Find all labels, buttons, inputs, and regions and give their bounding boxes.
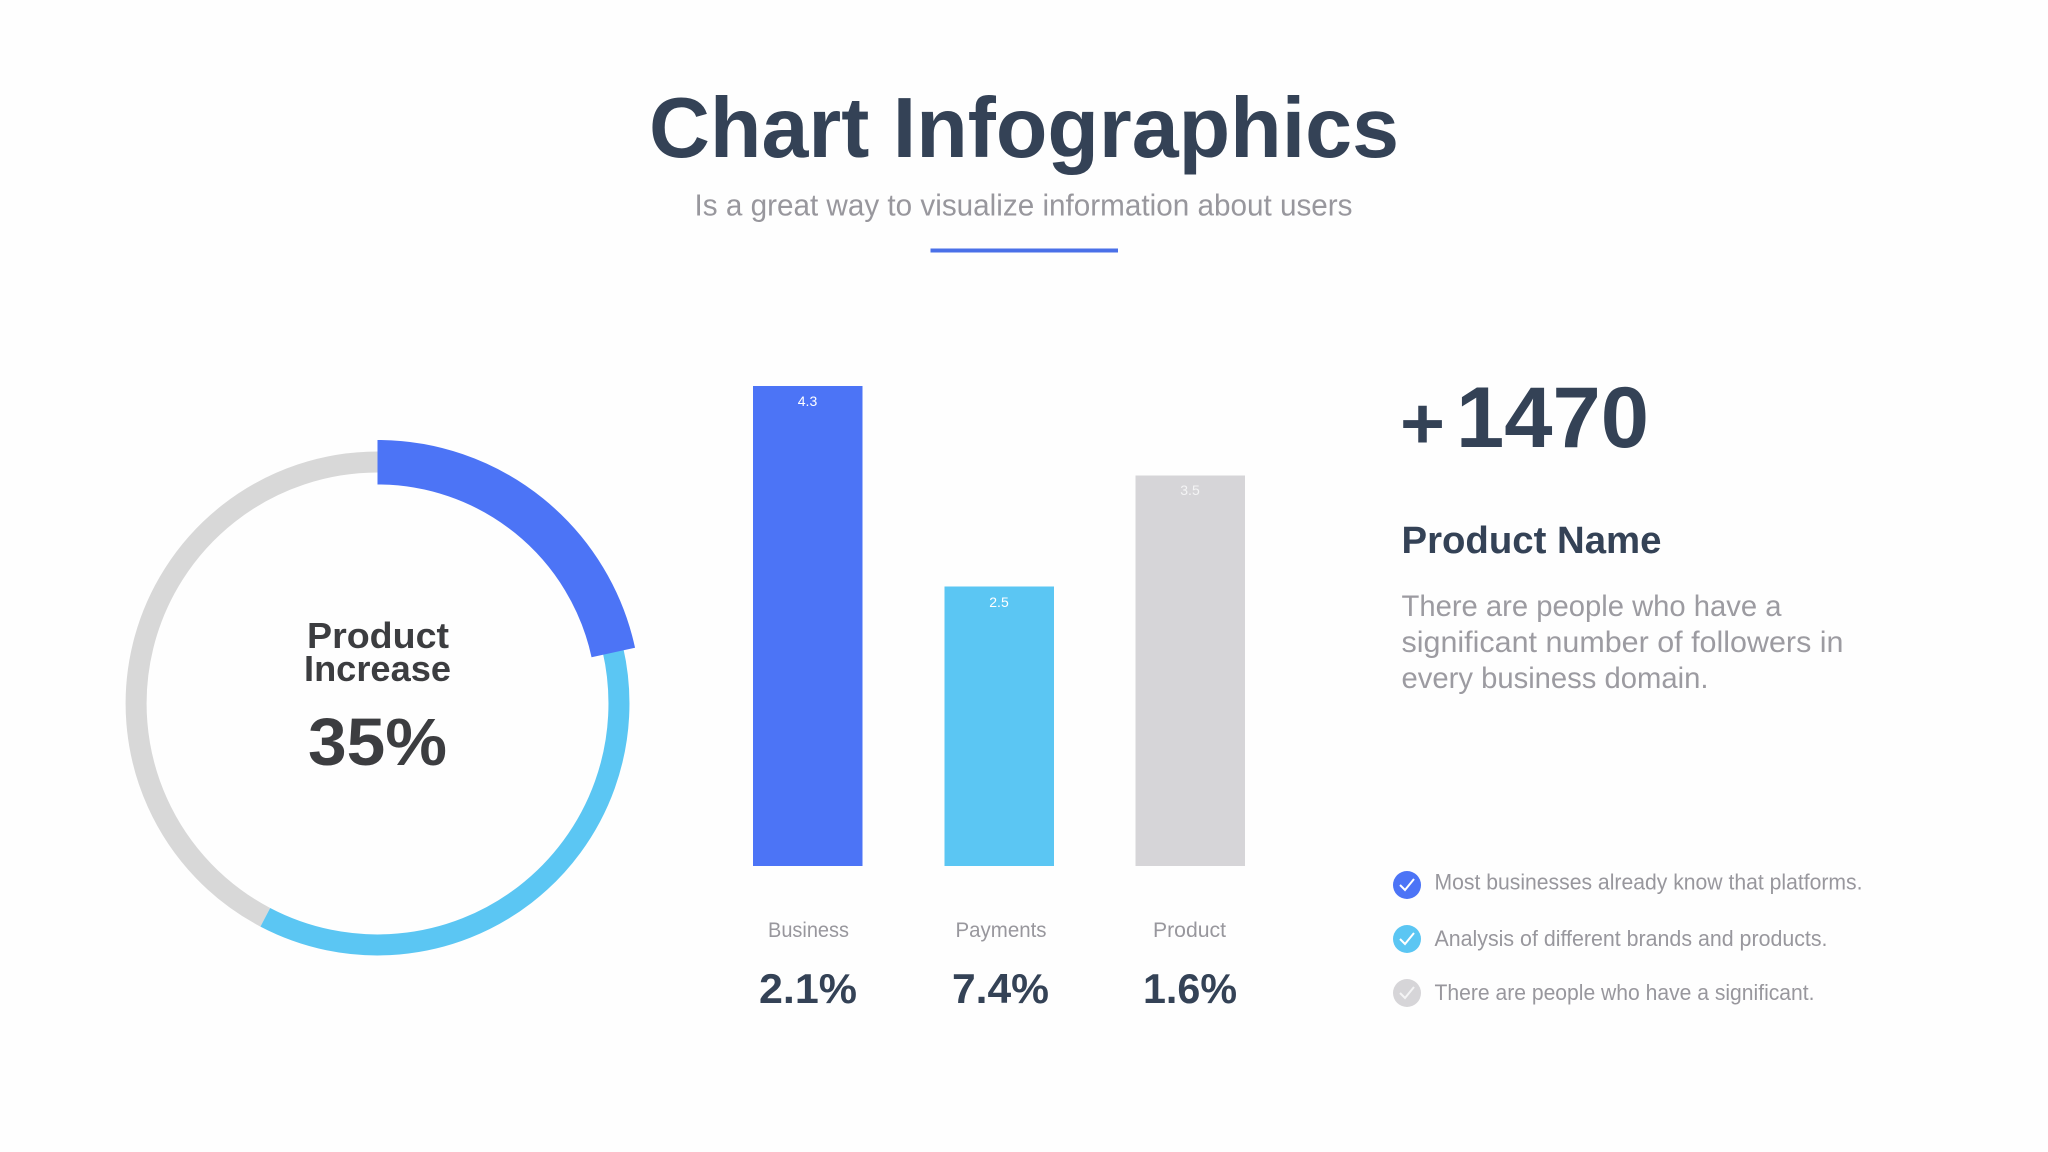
donut label: 35% <box>308 705 447 780</box>
item 3: There are people who have a significant. <box>1434 980 1814 1005</box>
panel: product details <box>1400 370 1844 695</box>
bar: Business <box>753 386 862 866</box>
donut label: Product <box>307 615 449 656</box>
product name: Product Name <box>1402 520 1662 562</box>
item 1: Most businesses already know that platforms. <box>1434 870 1862 894</box>
big number: 1470 <box>1456 370 1649 466</box>
category labels: Business <box>768 919 849 942</box>
description <box>1402 590 1844 695</box>
donut label <box>304 615 451 780</box>
category labels: Payments <box>956 919 1046 942</box>
panel: bar chart <box>753 386 1245 1012</box>
category labels: Product <box>1153 919 1226 942</box>
donut segment: grey <box>136 462 378 917</box>
category percentages: 1.6% <box>1143 965 1237 1012</box>
category percentages: 2.1% <box>759 965 857 1012</box>
bar: Product <box>1136 476 1245 866</box>
title: Chart Infographics <box>649 81 1399 176</box>
item 2: Analysis of different brands and products. <box>1434 926 1828 951</box>
donut label: Increase <box>304 648 451 689</box>
checklist <box>1393 870 1862 1007</box>
donut segment: cyan <box>265 649 619 945</box>
donut segment: blue <box>378 462 613 652</box>
header <box>649 81 1399 252</box>
description: significant number of followers in <box>1402 626 1844 659</box>
category percentages: 7.4% <box>952 965 1049 1012</box>
subtitle: Is a great way to visualize information about users <box>694 188 1352 222</box>
description: There are people who have a <box>1402 590 1782 623</box>
bar: Payments <box>944 586 1054 866</box>
bar: Payments: 2.5 <box>989 594 1009 610</box>
big number: + <box>1400 384 1445 464</box>
accent underline <box>930 248 1118 252</box>
category labels <box>768 919 1226 942</box>
bar: Business: 4.3 <box>798 393 817 409</box>
panel: donut chart <box>136 462 619 945</box>
category percentages <box>759 965 1237 1012</box>
description: every business domain. <box>1402 662 1708 695</box>
bar: Product: 3.5 <box>1180 482 1200 498</box>
